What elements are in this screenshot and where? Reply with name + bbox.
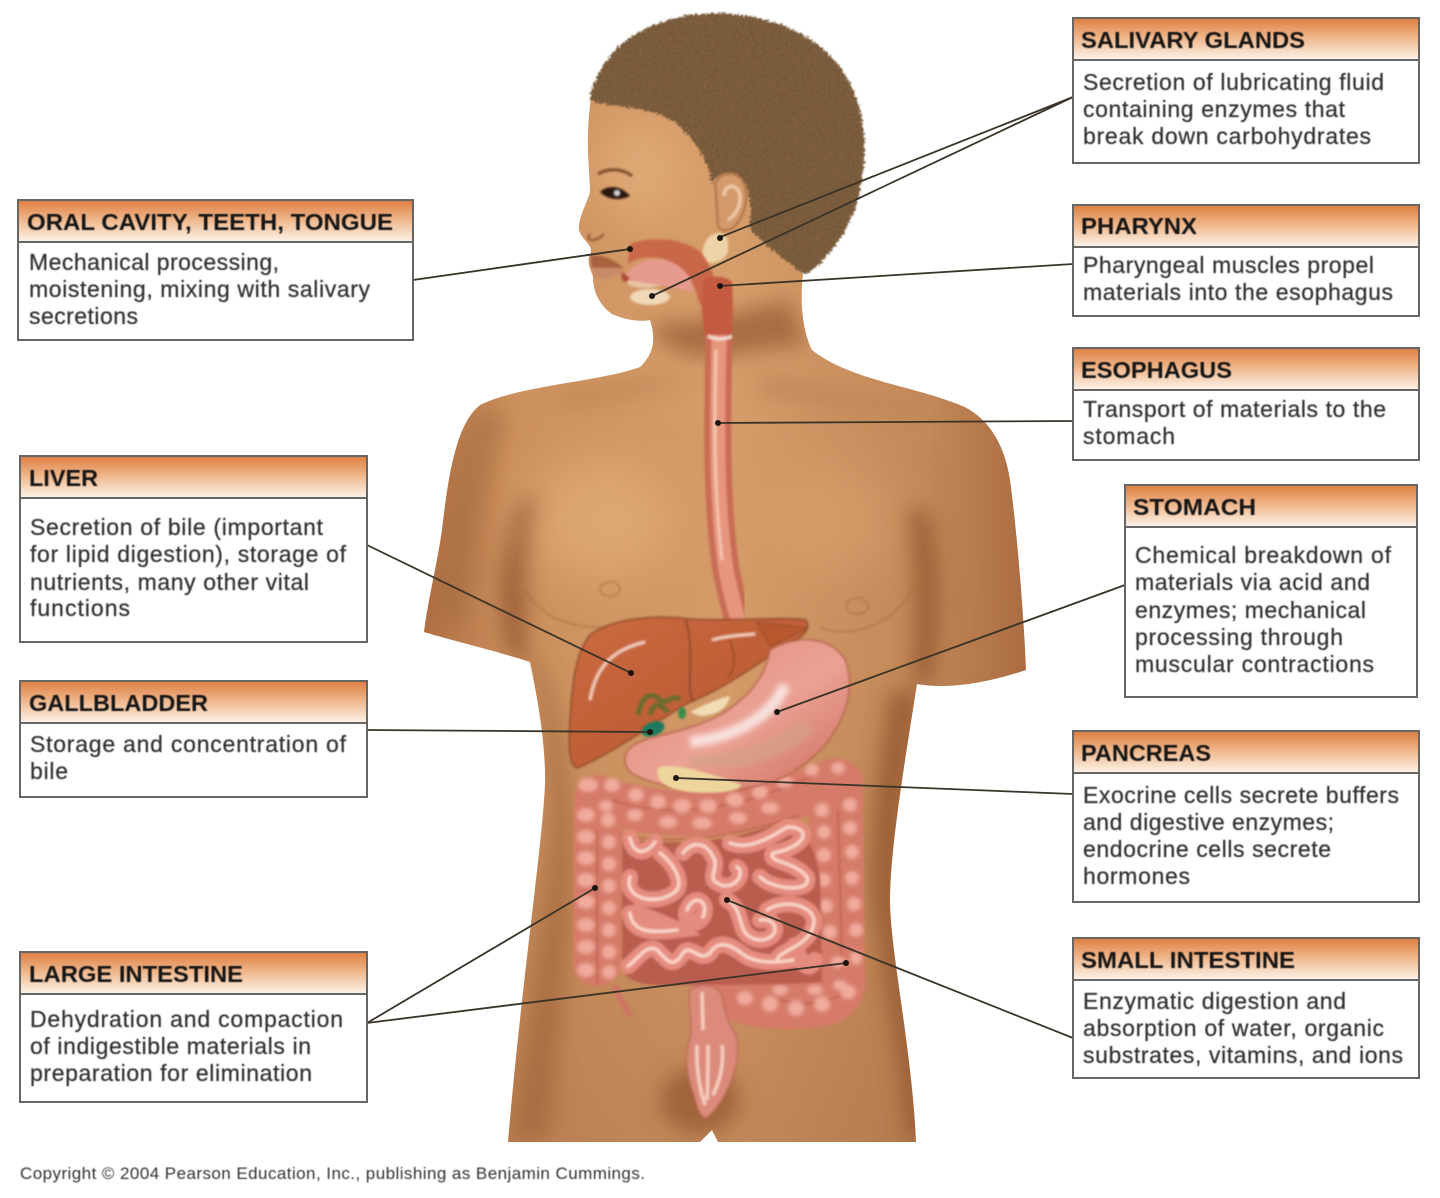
description: of indigestible materials in xyxy=(30,1033,311,1059)
panel: pharynx xyxy=(1073,205,1419,316)
description xyxy=(29,249,370,329)
body shading xyxy=(430,120,939,1140)
colon haustra xyxy=(577,762,863,1016)
description: endocrine cells secrete xyxy=(1083,836,1331,862)
description: Pharyngeal muscles propel xyxy=(1083,252,1374,278)
description: moistening, mixing with salivary xyxy=(29,276,370,302)
description xyxy=(1083,69,1384,149)
panel: gallbladder xyxy=(20,681,367,797)
pancreas xyxy=(657,766,741,793)
ear xyxy=(715,174,746,230)
description: secretions xyxy=(29,303,138,329)
panel: oral cavity, teeth, tongue xyxy=(18,200,413,340)
stomach xyxy=(625,640,849,790)
description: break down carbohydrates xyxy=(1083,123,1371,149)
description: Mechanical processing, xyxy=(29,249,279,275)
description: absorption of water, organic xyxy=(1083,1015,1384,1041)
heading: LARGE INTESTINE xyxy=(29,961,243,987)
description xyxy=(30,514,347,621)
heading: PANCREAS xyxy=(1081,740,1211,766)
gallbladder and bile ducts xyxy=(638,695,730,740)
panel: liver xyxy=(20,456,367,642)
description xyxy=(1083,988,1403,1068)
description xyxy=(1083,782,1399,889)
colon body xyxy=(597,782,838,1003)
description: Storage and concentration of xyxy=(30,731,347,757)
heading: ESOPHAGUS xyxy=(1081,357,1232,383)
description: functions xyxy=(30,595,130,621)
description: preparation for elimination xyxy=(30,1060,312,1086)
panel: esophagus xyxy=(1073,348,1419,460)
description: Secretion of bile (important xyxy=(30,514,324,540)
heading: ORAL CAVITY, TEETH, TONGUE xyxy=(27,209,393,235)
human figure illustration xyxy=(400,13,1060,1150)
panel: stomach xyxy=(1125,485,1417,697)
description xyxy=(1083,252,1393,305)
description xyxy=(30,731,347,784)
description xyxy=(1135,542,1392,677)
description: processing through xyxy=(1135,624,1343,650)
panel: small intestine xyxy=(1073,938,1419,1078)
heading: SMALL INTESTINE xyxy=(1081,947,1295,973)
heading: GALLBLADDER xyxy=(29,690,208,716)
coils xyxy=(628,827,815,967)
description xyxy=(30,1006,343,1086)
description: Transport of materials to the xyxy=(1083,396,1386,422)
face features xyxy=(588,170,632,278)
description: nutrients, many other vital xyxy=(30,569,309,595)
panel: large intestine xyxy=(20,952,367,1102)
description: containing enzymes that xyxy=(1083,96,1346,122)
description: Chemical breakdown of xyxy=(1135,542,1392,568)
description: Enzymatic digestion and xyxy=(1083,988,1346,1014)
description: stomach xyxy=(1083,423,1175,449)
esophagus xyxy=(702,277,742,635)
liver xyxy=(569,617,808,768)
torso and head skin xyxy=(424,92,1026,1142)
heading: SALIVARY GLANDS xyxy=(1081,27,1305,53)
description: materials into the esophagus xyxy=(1083,279,1393,305)
description: enzymes; mechanical xyxy=(1135,597,1366,623)
panel: pancreas xyxy=(1073,731,1419,902)
description: materials via acid and xyxy=(1135,569,1370,595)
hair xyxy=(590,13,865,275)
leader lines with endpoint dots xyxy=(367,97,1125,1038)
description: Secretion of lubricating fluid xyxy=(1083,69,1384,95)
copyright note: Copyright © 2004 Pearson Education, Inc., publishing as Benjamin Cummings. xyxy=(20,1164,645,1183)
chest creases and nipples xyxy=(525,582,912,632)
description: for lipid digestion), storage of xyxy=(30,541,347,567)
heading: STOMACH xyxy=(1133,494,1256,520)
description: and digestive enzymes; xyxy=(1083,809,1334,835)
large intestine xyxy=(577,762,863,1016)
description: bile xyxy=(30,758,68,784)
rectum xyxy=(687,985,738,1118)
oral cavity and pharynx xyxy=(621,239,720,308)
salivary glands xyxy=(627,233,728,305)
colon grooves xyxy=(597,772,850,1003)
description: hormones xyxy=(1083,863,1190,889)
description: substrates, vitamins, and ions xyxy=(1083,1042,1403,1068)
heading: LIVER xyxy=(29,465,98,491)
description: muscular contractions xyxy=(1135,651,1374,677)
heading: PHARYNX xyxy=(1081,213,1198,239)
description: Dehydration and compaction xyxy=(30,1006,343,1032)
panel: salivary glands xyxy=(1073,18,1419,163)
small intestine xyxy=(622,825,822,985)
description xyxy=(1083,396,1386,449)
description: Exocrine cells secrete buffers xyxy=(1083,782,1399,808)
